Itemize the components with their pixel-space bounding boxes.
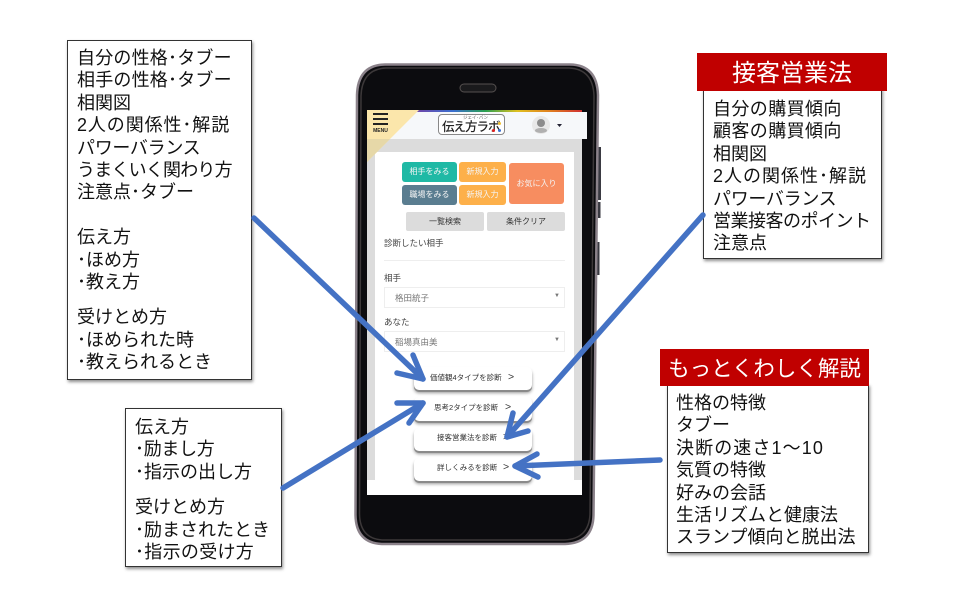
text box: 性格とタブー: 相関図 — [77, 93, 131, 113]
text box: 接客営業法: 相関図 — [713, 144, 767, 164]
text box: 性格とタブー: ･ほめられた時 — [77, 330, 194, 350]
select: あなた: ▼ — [554, 337, 560, 343]
text box: もっとくわしく解説: スランプ傾向と脱出法 — [676, 527, 855, 547]
text box: 性格とタブー: うまくいく関わり方 — [77, 160, 232, 180]
text box: 性格とタブー: 相手の性格･タブー — [77, 70, 232, 90]
button: 相手をみる — [402, 162, 457, 182]
button: 思考2タイプを診断: > — [505, 401, 511, 413]
text box: 性格とタブー: ･教え方 受けとめ方 — [77, 272, 167, 327]
button: 思考2タイプを診断: 思考2タイプを診断 — [434, 403, 498, 412]
button: 詳しくみるを診断: > — [503, 461, 509, 473]
button: 一覧検索 — [406, 212, 484, 231]
button: 新規入力 — [459, 162, 506, 182]
text box: 接客営業法: 営業接客のポイント — [713, 211, 870, 231]
button: 価値観4タイプを診断 — [414, 367, 532, 390]
text box: 性格とタブー: ･ほめ方 — [77, 250, 140, 270]
button: お気に入り — [509, 163, 564, 204]
text box: 励まし方 — [125, 408, 282, 567]
text box: 接客営業法: 2人の関係性･解説 — [713, 166, 867, 186]
heading: もっとくわしく解説 — [660, 349, 869, 386]
button: お気に入り: お気に入り — [516, 179, 556, 188]
icon: user avatar — [532, 116, 562, 134]
text box: もっとくわしく解説 — [667, 384, 869, 553]
button: 思考2タイプを診断 — [414, 397, 532, 421]
phone screen — [367, 110, 587, 495]
text box: 接客営業法: パワーバランス — [713, 189, 836, 209]
label: 診断したい相手: 診断したい相手 — [384, 238, 444, 248]
heading: 接客営業法: 接客営業法 — [732, 60, 852, 87]
label: あなた: あなた — [384, 317, 410, 327]
button: 一覧検索: 一覧検索 — [429, 217, 461, 226]
button: 職場をみる — [402, 185, 457, 205]
label: 相手: 相手 — [384, 273, 401, 283]
button: 条件クリア: 条件クリア — [506, 217, 546, 226]
heading: もっとくわしく解説: もっとくわしく解説 — [668, 357, 861, 381]
text box: 励まし方: 伝え方 — [135, 417, 189, 437]
select: あなた: 稲場真由美 — [395, 337, 438, 347]
logo: 伝え方ラボ — [442, 120, 500, 134]
button: 接客営業法を診断: 接客営業法を診断 — [437, 433, 497, 442]
button: 条件クリア — [487, 212, 565, 231]
button: 詳しくみるを診断: 詳しくみるを診断 — [437, 463, 497, 472]
button: 接客営業法を診断: > — [503, 431, 509, 443]
text box: もっとくわしく解説: 気質の特徴 — [676, 460, 766, 480]
button: 新規入力 2 — [459, 185, 506, 205]
text box: 励まし方: ･励まし方 — [135, 439, 214, 459]
button: 価値観4タイプを診断: 価値観4タイプを診断 — [430, 373, 502, 382]
button: 価値観4タイプを診断: > — [508, 371, 514, 383]
text box: 性格とタブー: ･教えられるとき — [77, 352, 212, 372]
text box: もっとくわしく解説: 決断の速さ1～10 — [676, 438, 824, 458]
button: 職場をみる: 職場をみる — [410, 190, 450, 199]
logo — [438, 114, 505, 135]
text box: 接客営業法: 注意点 — [713, 233, 767, 253]
text box: 性格とタブー: 2人の関係性･解説 — [77, 115, 230, 135]
select: 相手: ▼ — [554, 293, 560, 299]
button: 詳しくみるを診断 — [414, 458, 532, 481]
text box: 性格とタブー: 自分の性格･タブー — [77, 48, 232, 68]
arrow: to 接客営業法 — [507, 215, 703, 437]
text box: 性格とタブー — [67, 40, 252, 380]
button: 新規入力 2: 新規入力 — [466, 190, 498, 199]
icon: menu: MENU — [373, 128, 388, 134]
text box: 励まし方: ･励まされたとき — [135, 520, 270, 540]
text box: 接客営業法: 自分の購買傾向 — [713, 99, 842, 119]
arrow: to 価値観4タイプ — [254, 218, 423, 379]
text box: 性格とタブー: 注意点･タブー — [77, 182, 194, 202]
text box: 性格とタブー: 伝え方 — [77, 227, 131, 247]
button: 接客営業法を診断 — [414, 428, 532, 451]
text box: もっとくわしく解説: タブー — [676, 415, 730, 435]
text box: 励まし方: ･指示の受け方 — [135, 542, 254, 562]
button: 新規入力: 新規入力 — [466, 167, 498, 176]
text box: もっとくわしく解説: 好みの会話 — [676, 483, 766, 503]
logo: ジェイ･バン — [463, 115, 488, 120]
select: 相手 — [384, 287, 565, 308]
phone — [354, 63, 601, 546]
text box: 接客営業法 — [703, 88, 882, 259]
button: 相手をみる: 相手をみる — [410, 167, 450, 176]
select: 相手: 格田統子 — [395, 293, 429, 303]
text box: 性格とタブー: パワーバランス — [77, 138, 200, 158]
arrow: to 詳しくみる — [515, 454, 660, 477]
text box: もっとくわしく解説: 性格の特徴 — [676, 393, 766, 413]
select: あなた — [384, 331, 565, 352]
heading: 接客営業法 — [697, 53, 887, 91]
text box: 接客営業法: 顧客の購買傾向 — [713, 121, 842, 141]
text box: 励まし方: ･指示の出し方 受けとめ方 — [135, 462, 252, 517]
arrow: to 思考2タイプ — [283, 403, 423, 488]
text box: もっとくわしく解説: 生活リズムと健康法 — [676, 505, 838, 525]
